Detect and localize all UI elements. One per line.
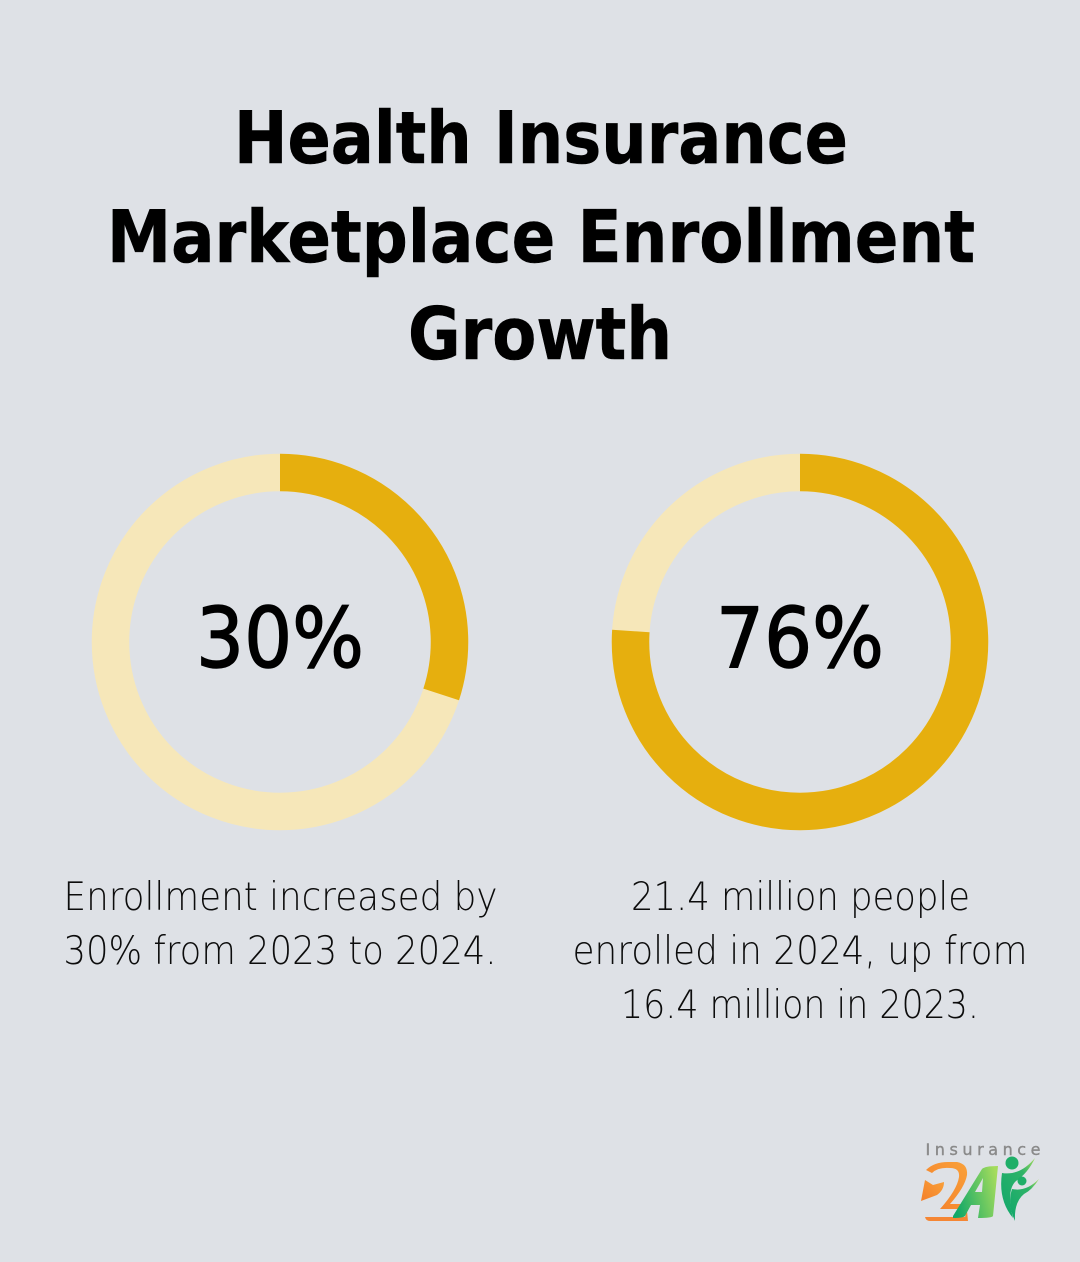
logo small figure bbox=[1010, 1176, 1039, 1221]
logo underline bbox=[925, 1211, 968, 1221]
caption: 76%: enrolled in 2024, up from bbox=[572, 928, 1028, 974]
title: Growth bbox=[408, 292, 672, 376]
caption: 76%: 21.4 million people bbox=[631, 874, 970, 920]
logo: Insurance 2 Ai bbox=[921, 1140, 1040, 1221]
donut chart: 76% bbox=[630, 472, 970, 812]
stat: 30%: 30% bbox=[196, 590, 364, 687]
caption: 30%: Enrollment increased by bbox=[64, 874, 498, 920]
caption: 30% bbox=[64, 874, 498, 974]
caption: 30%: 30% from 2023 to 2024. bbox=[64, 928, 496, 974]
donut chart: 30% bbox=[110, 472, 450, 812]
title: Health Insurance bbox=[234, 96, 848, 180]
caption: 76%: 16.4 million in 2023. bbox=[621, 982, 979, 1028]
logo numeral 2 bbox=[926, 1162, 967, 1209]
title: Marketplace Enrollment bbox=[107, 195, 975, 279]
panel: 30% enrollment increase bbox=[64, 472, 498, 974]
logo arrow bbox=[921, 1180, 944, 1201]
stat: 76%: 76% bbox=[716, 590, 884, 687]
logo large figure bbox=[1001, 1156, 1035, 1218]
panel: 76% enrolled in 2024 bbox=[572, 472, 1028, 1028]
caption: 76% bbox=[572, 874, 1028, 1028]
logo letter A bbox=[953, 1166, 998, 1218]
logo wordmark: Insurance bbox=[926, 1140, 1040, 1159]
title bbox=[107, 96, 975, 376]
